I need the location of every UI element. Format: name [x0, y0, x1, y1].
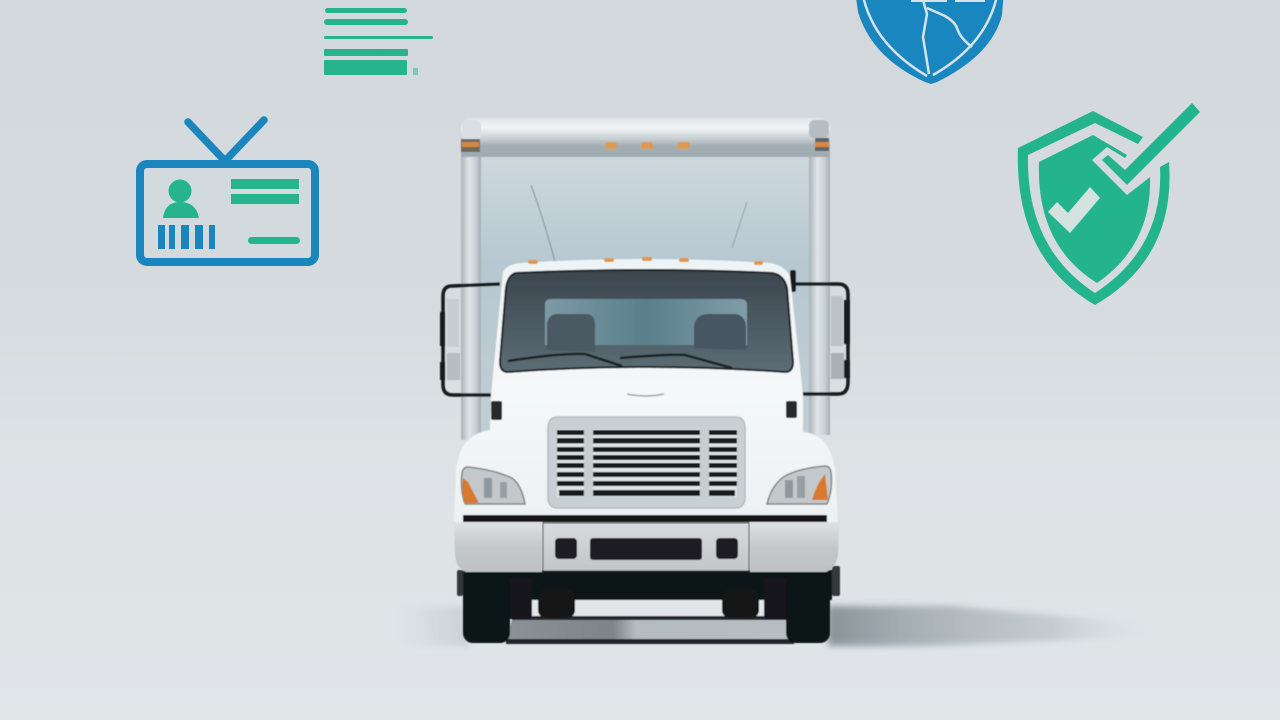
marker lights: [528, 257, 763, 265]
grille: [548, 417, 745, 508]
icon: document lines: [324, 8, 433, 75]
windshield: [500, 270, 793, 372]
truck: [440, 118, 850, 644]
floor shadow: [395, 606, 1150, 646]
suspension: [457, 566, 840, 596]
step lights: [491, 401, 797, 420]
icon: ID card: [140, 120, 315, 262]
ground reflection: [505, 600, 794, 644]
tires: [463, 572, 830, 643]
icon: person: [163, 180, 199, 218]
mirrors: [440, 270, 850, 395]
underbody: [463, 570, 832, 600]
hood latch: [627, 394, 664, 396]
cab body: [454, 259, 838, 522]
card text lines: [231, 179, 300, 244]
right headlight: [767, 466, 832, 504]
icon: blue shield with map: [855, 0, 1004, 84]
icon: green shield with check: [1018, 103, 1200, 305]
left headlight: [461, 467, 525, 504]
cargo box: [461, 118, 830, 440]
inner wheels: [505, 578, 791, 619]
barcode: [158, 225, 215, 249]
bumper: [454, 515, 839, 572]
